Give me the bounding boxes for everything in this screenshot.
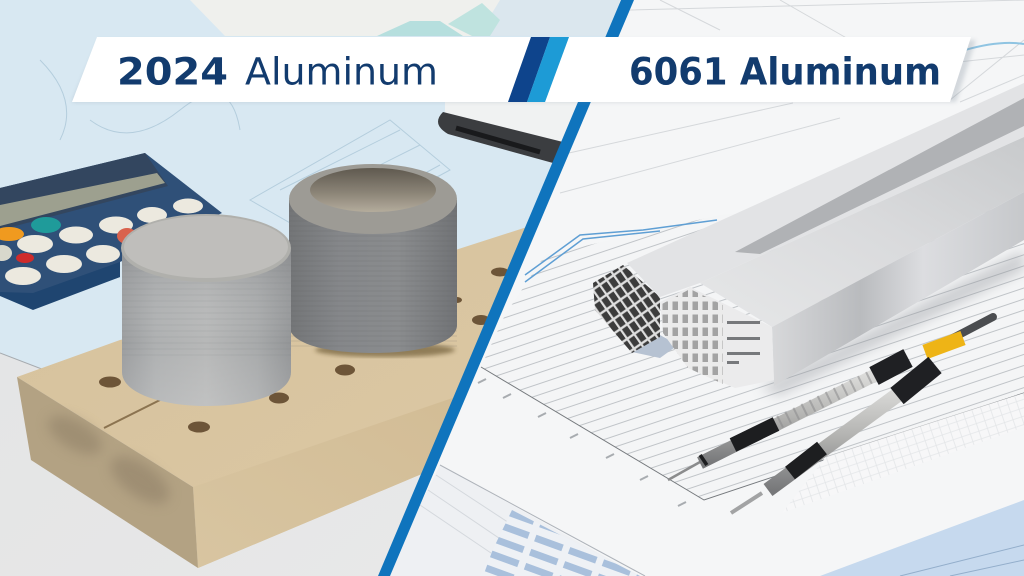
pen clipboard bbox=[438, 102, 578, 163]
banner: 2024 Aluminum: 2024 bbox=[117, 50, 228, 94]
bottom sheet bbox=[420, 464, 646, 576]
solid cylinder bbox=[121, 214, 291, 406]
chart axis lines bbox=[481, 367, 1024, 500]
banner: 2024 Aluminum: Aluminum bbox=[245, 50, 438, 94]
upper sheet lines bbox=[560, 0, 1024, 193]
shadow under bar bbox=[760, 250, 1024, 395]
rear cable with yellow sleeve bbox=[925, 317, 993, 352]
axis tick labels bbox=[478, 379, 686, 506]
divider: diagonal blue line bbox=[378, 0, 634, 576]
faint grid bbox=[782, 393, 1024, 513]
probes bbox=[668, 317, 993, 513]
ruled data sheet bbox=[481, 190, 1024, 500]
blueprint lines bbox=[40, 60, 450, 240]
panel: 6061 aluminum photo bbox=[390, 0, 1024, 576]
title banner bbox=[72, 37, 976, 102]
probe one bbox=[668, 358, 908, 480]
hex bar back bbox=[593, 265, 678, 358]
probe two bbox=[731, 365, 935, 513]
center accent stripes bbox=[508, 37, 569, 102]
hex bar front bbox=[627, 83, 1024, 388]
icon: calculator bbox=[0, 153, 222, 310]
hollow cylinder bbox=[289, 164, 457, 353]
lower-right blue sheet bbox=[820, 500, 1024, 576]
panel: 2024 aluminum photo bbox=[0, 0, 640, 576]
wood block bbox=[17, 226, 540, 568]
banner: 2024 Aluminum bbox=[72, 37, 531, 102]
chart curves bbox=[525, 220, 717, 282]
banner: 6061 Aluminum: 6061 Aluminum bbox=[629, 50, 941, 94]
blue blueprint paper bbox=[0, 0, 606, 368]
cylinder shadow bbox=[315, 343, 455, 357]
banner: 6061 Aluminum bbox=[545, 37, 971, 102]
paper at top edge bbox=[190, 0, 625, 36]
